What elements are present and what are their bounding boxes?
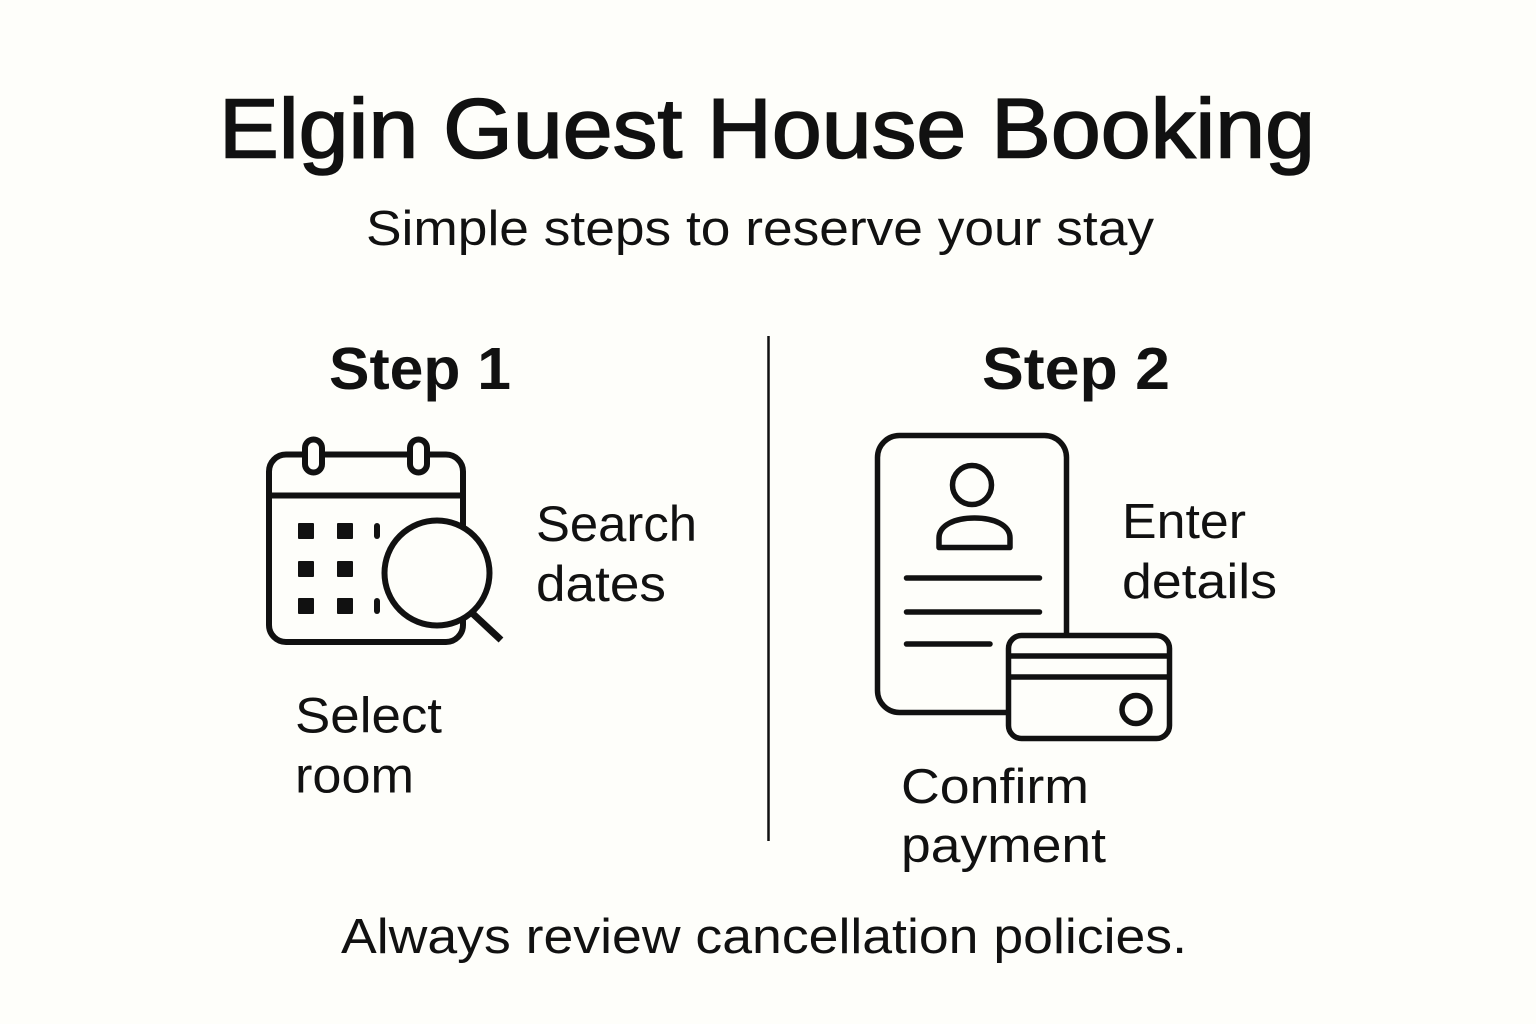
- label: enter details: details: [1122, 555, 1277, 609]
- panel: step 2: [878, 336, 1277, 873]
- label: search dates: Search: [536, 496, 697, 552]
- label: confirm payment: Confirm: [901, 760, 1089, 814]
- heading: step 1: Step 1: [329, 336, 511, 402]
- icon: guest form document: [878, 436, 1066, 712]
- label: confirm payment: payment: [901, 819, 1106, 873]
- footer note: Always review cancellation policies.: [341, 910, 1187, 964]
- panel: step 1: [269, 336, 697, 804]
- heading: step 2: Step 2: [982, 336, 1170, 402]
- icon: calendar with magnifier: [269, 440, 501, 642]
- label: enter details: Enter: [1122, 495, 1246, 549]
- subtitle: Simple steps to reserve your stay: [366, 202, 1155, 256]
- divider: [767, 336, 770, 841]
- icon: payment card: [1008, 636, 1170, 738]
- label: search dates: dates: [536, 556, 666, 612]
- label: select room: Select: [295, 688, 442, 744]
- title: Elgin Guest House Booking: [219, 82, 1315, 176]
- label: select room: room: [295, 748, 414, 804]
